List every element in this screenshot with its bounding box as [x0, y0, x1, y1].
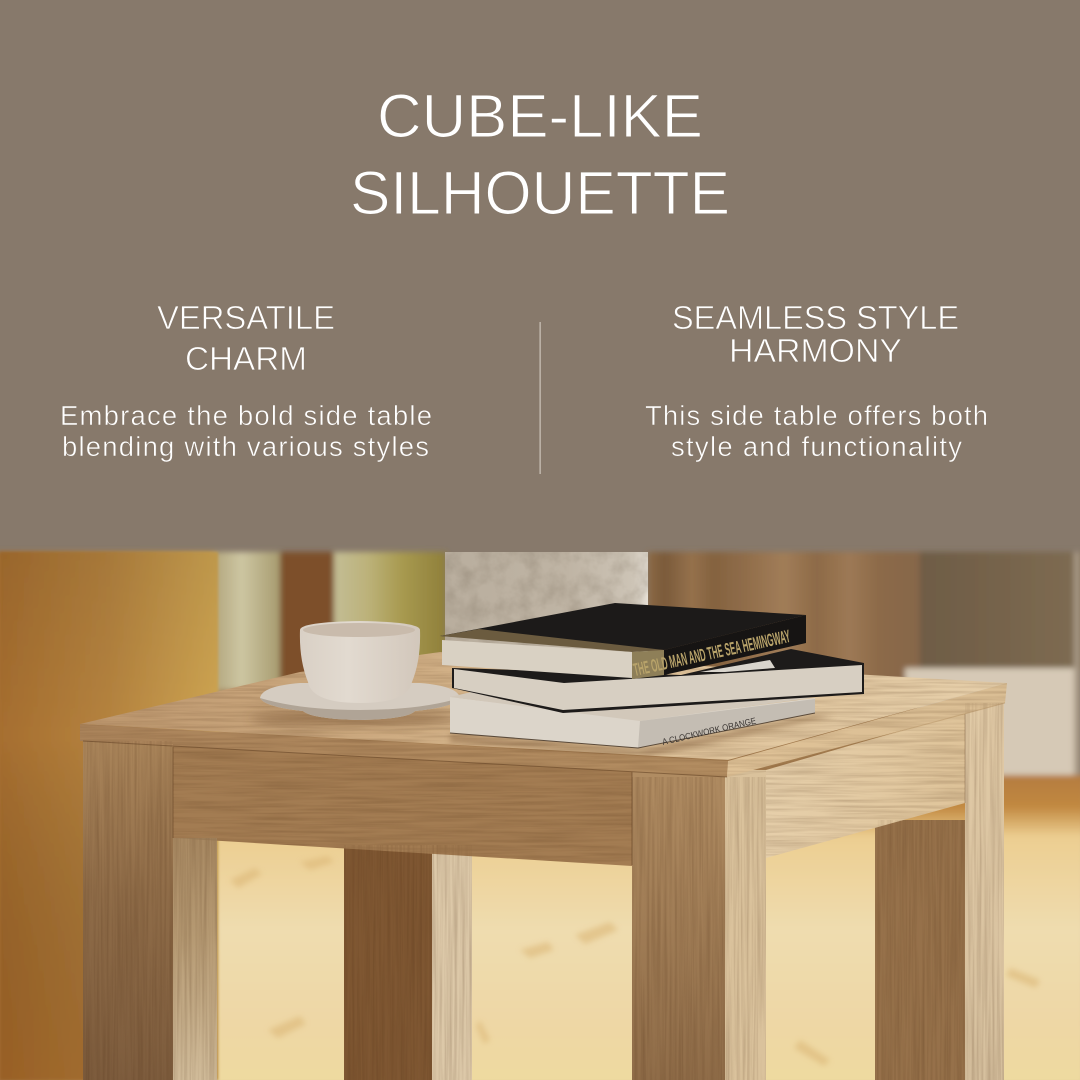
floor marks	[230, 856, 1040, 1066]
table: front-left leg	[83, 741, 217, 1080]
table: back-right leg	[875, 700, 1004, 1080]
table: tabletop right edge	[727, 683, 1007, 777]
column: seamless style harmony	[645, 299, 988, 462]
column: versatile charm	[60, 299, 432, 462]
book shadow	[450, 714, 835, 756]
title	[350, 82, 730, 227]
room background	[0, 552, 1080, 1080]
heading: seamless style harmony: HARMONY	[729, 332, 902, 369]
wood grain	[70, 645, 1015, 1080]
table: tabletop left edge	[80, 724, 728, 777]
text block: seamless style description	[645, 400, 988, 462]
side table	[70, 645, 1015, 1080]
heading: seamless style harmony	[672, 299, 959, 369]
text block: versatile charm description: Embrace the bold side table	[60, 400, 432, 431]
divider	[540, 322, 541, 474]
saucer shadow	[250, 711, 460, 725]
book: middle black	[452, 649, 864, 713]
icon: cup and saucer	[260, 621, 460, 720]
chair	[0, 552, 218, 1080]
table: tabletop surface	[80, 652, 1007, 760]
text block: seamless style description: style and functionality	[671, 431, 962, 462]
photo: side table scene	[0, 552, 1080, 1080]
text block: versatile charm description	[60, 400, 432, 462]
table: right apron	[766, 712, 965, 858]
table: front leg	[632, 770, 766, 1080]
text block: seamless style description: This side table offers both	[645, 400, 988, 431]
book: a clockwork orange	[450, 690, 815, 748]
heading: seamless style harmony: SEAMLESS STYLE	[672, 299, 959, 336]
books stack	[440, 603, 864, 748]
text block: versatile charm description: blending with various styles	[62, 431, 429, 462]
heading: versatile charm: CHARM	[185, 340, 307, 377]
table: back-left leg	[344, 845, 472, 1080]
panel: heading background	[0, 0, 1080, 552]
heading: versatile charm	[157, 299, 335, 377]
book: the old man and the sea	[440, 603, 806, 680]
heading: versatile charm: VERSATILE	[157, 299, 335, 336]
title: SILHOUETTE	[350, 159, 730, 227]
table: left apron	[173, 744, 632, 866]
books stack: THE OLD MAN AND THE SEA HEMINGWAY	[632, 626, 792, 680]
book: a clockwork orange: A CLOCKWORK ORANGE	[661, 716, 757, 747]
joint lines	[83, 703, 1005, 865]
stone pillar	[445, 552, 648, 662]
title: CUBE-LIKE	[377, 82, 703, 150]
